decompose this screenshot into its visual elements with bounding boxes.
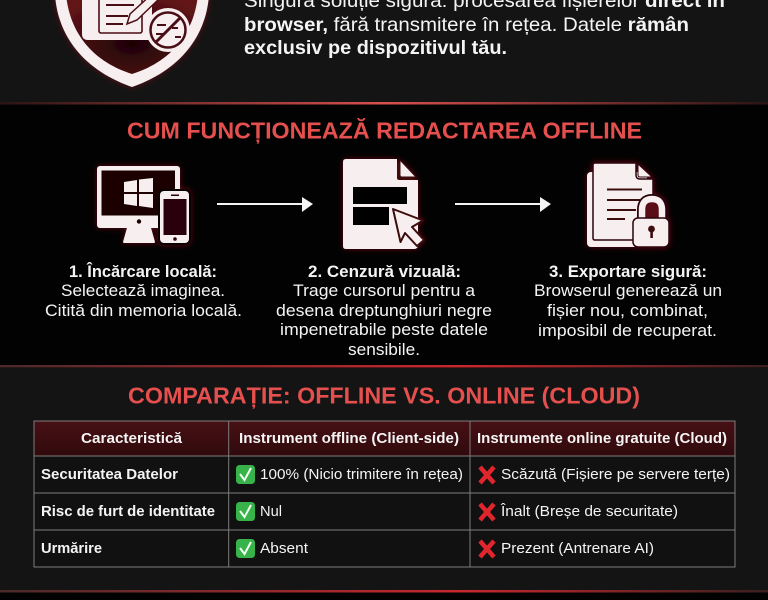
table row: tracking xyxy=(41,539,654,558)
icon: document with redaction and cursor xyxy=(343,159,424,249)
text: step 3 xyxy=(534,263,722,340)
table row: tracking: Absent xyxy=(260,540,309,557)
table row: data security xyxy=(41,465,730,484)
panel: process background xyxy=(0,105,768,365)
table row: tracking: Urmărire xyxy=(41,540,102,557)
icon: monitor and phone xyxy=(97,166,191,245)
text: step 2: desena dreptunghiuri negre xyxy=(276,302,492,320)
text: step 2: 2. Cenzură vizuală: xyxy=(308,263,461,281)
table header row: Instrumente online gratuite (Cloud) xyxy=(477,430,727,447)
panel: comparison background xyxy=(0,368,768,590)
text: header intro: exclusiv pe dispozitivul tău. xyxy=(244,37,507,59)
text: step 2: sensibile. xyxy=(348,341,420,359)
heading: how offline redaction works: CUM FUNCȚIONEAZĂ REDACTAREA OFFLINE xyxy=(127,116,642,144)
text: header intro: browser, fără transmitere în rețea. Datele rămân xyxy=(244,14,689,36)
text: step 1: Selectează imaginea. xyxy=(61,282,225,300)
table header row: Caracteristică xyxy=(81,430,183,447)
text: step 2: impenetrabile peste datele xyxy=(280,321,488,339)
text: step 2: Trage cursorul pentru a xyxy=(293,282,476,300)
table row: identity theft risk xyxy=(41,502,678,521)
arrow: step 2 to 3 xyxy=(455,197,551,212)
icon: documents with padlock xyxy=(587,163,669,247)
text: step 3: Browserul generează un xyxy=(534,282,722,300)
text: step 3: fișier nou, combinat, xyxy=(547,302,708,320)
heading: comparison: COMPARAȚIE: OFFLINE VS. ONLINE (CLOUD) xyxy=(128,382,640,408)
table header row: Instrument offline (Client-side) xyxy=(239,430,459,447)
table row: data security: Securitatea Datelor xyxy=(41,466,178,483)
text: step 3: 3. Exportare sigură: xyxy=(549,263,707,281)
table: offline vs online comparison xyxy=(34,421,735,567)
panel: header background xyxy=(0,0,768,102)
arrow: step 1 to 2 xyxy=(217,197,313,212)
table row: data security: Scăzută (Fișiere pe servere terțe) xyxy=(501,466,730,483)
text: step 3: imposibil de recuperat. xyxy=(538,322,717,340)
table row: identity theft risk: Nul xyxy=(260,503,282,520)
text: step 1: Citită din memoria locală. xyxy=(45,302,242,320)
text: header intro xyxy=(244,0,725,59)
table row: identity theft risk: Înalt (Breșe de securitate) xyxy=(500,503,678,520)
text: step 2 xyxy=(276,263,492,359)
icon: shield with document xyxy=(55,0,209,87)
table header row xyxy=(81,430,727,447)
table row: identity theft risk: Risc de furt de identitate xyxy=(41,503,215,520)
text: step 1: 1. Încărcare locală: xyxy=(69,262,217,281)
table row: tracking: Prezent (Antrenare AI) xyxy=(501,540,654,557)
table row: data security: 100% (Nicio trimitere în rețea) xyxy=(260,466,463,483)
text: step 1 xyxy=(45,262,242,320)
